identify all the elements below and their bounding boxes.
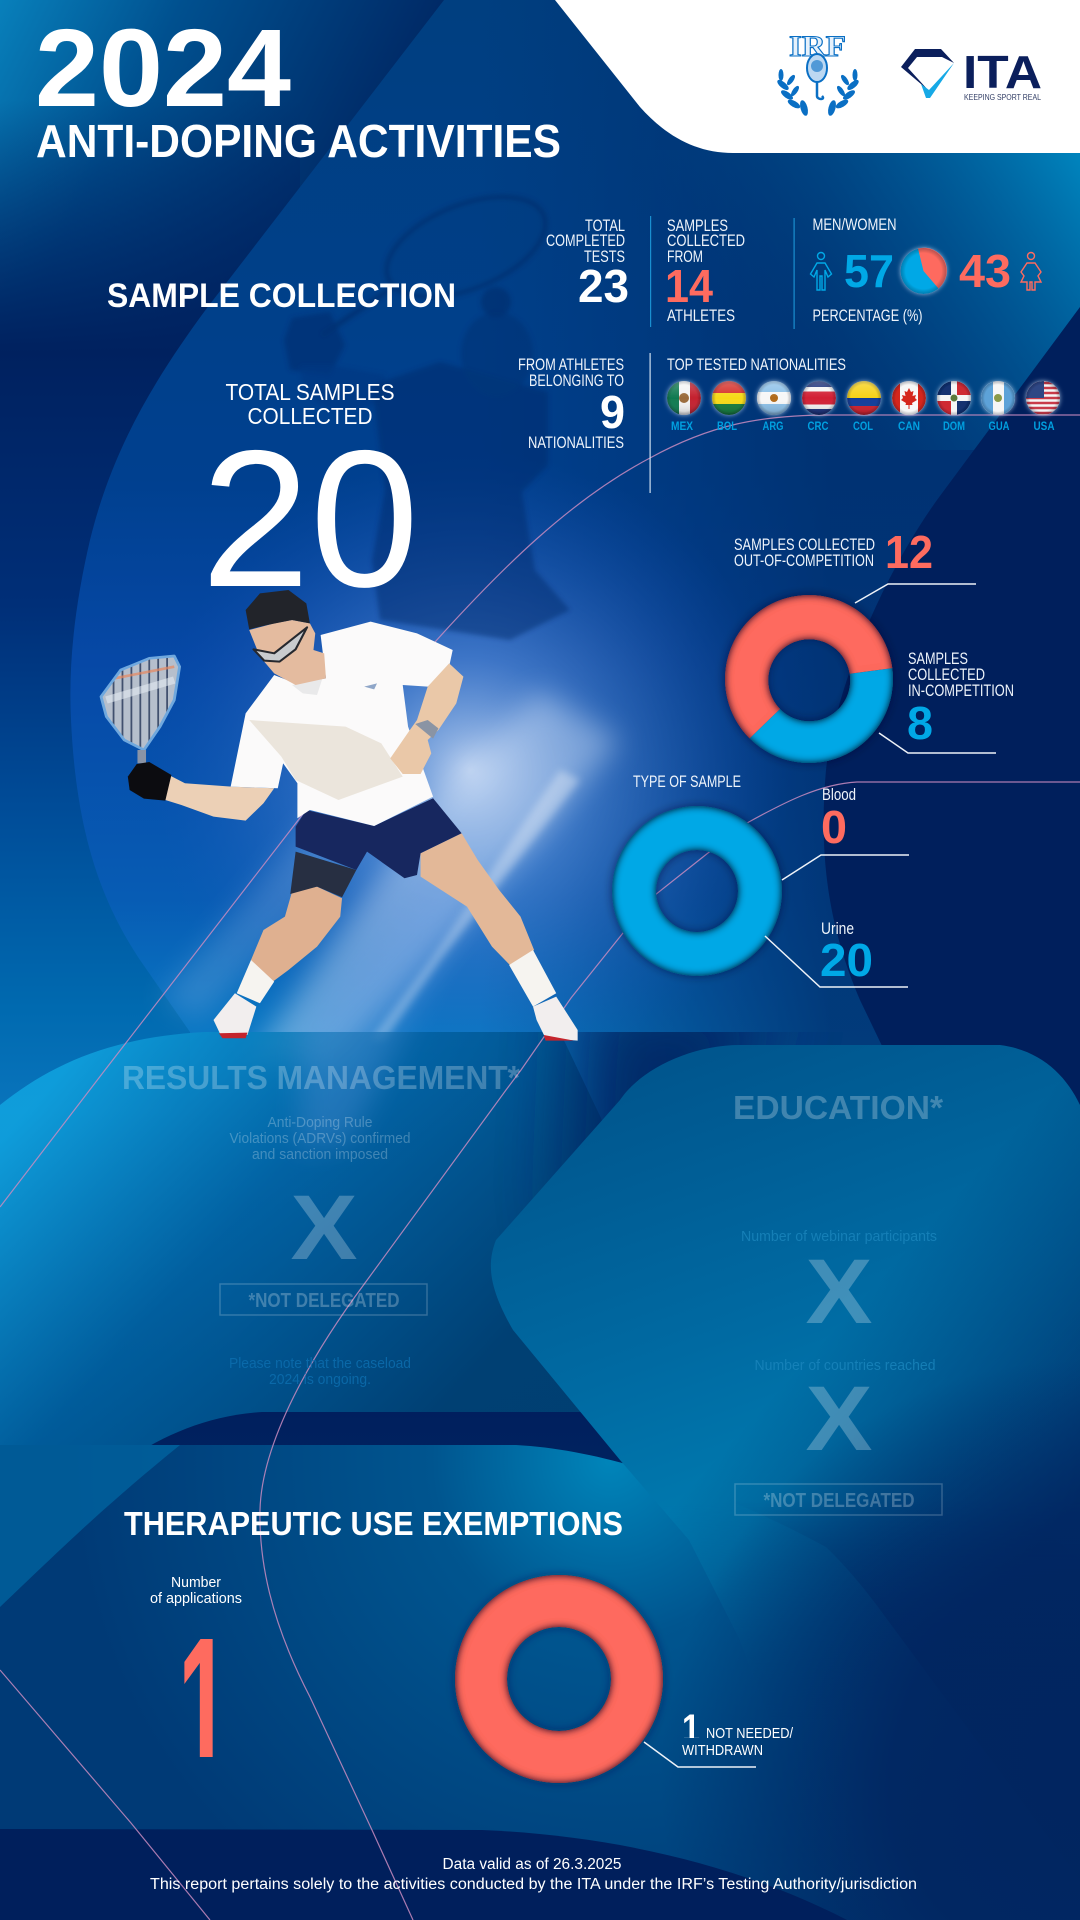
flag: Costa Rica xyxy=(802,381,836,415)
front sock and shoe xyxy=(214,960,274,1038)
athlete illustration xyxy=(101,590,578,1041)
flag codes: USA xyxy=(1034,419,1055,433)
stat: total completed tests: TOTAL xyxy=(585,217,625,235)
flag: Colombia xyxy=(847,381,881,415)
stat: samples collected from athletes xyxy=(665,217,745,325)
label: blood: 0 xyxy=(821,801,847,853)
donut chart: in vs out of competition xyxy=(725,595,893,763)
flag codes: MEX xyxy=(671,419,693,433)
section: results management: 2024 is ongoing. xyxy=(269,1371,371,1388)
label: urine: Urine xyxy=(821,920,854,938)
stat: samples collected from athletes: SAMPLES xyxy=(667,217,728,235)
section: education: Number of countries reached xyxy=(754,1357,936,1374)
section: results management: and sanction imposed xyxy=(252,1146,388,1163)
section: results management: Please note that the caseload xyxy=(229,1355,411,1372)
header white corner xyxy=(555,0,1080,153)
stat: total completed tests: 23 xyxy=(578,260,629,312)
section: education: X xyxy=(806,1241,872,1343)
background photo: faded athlete xyxy=(284,177,570,640)
divider xyxy=(794,218,795,329)
flag: USA xyxy=(1026,381,1060,415)
total samples collected: TOTAL SAMPLES xyxy=(226,379,394,405)
footer note xyxy=(150,1856,917,1893)
logo: ITA: KEEPING SPORT REAL xyxy=(964,92,1041,102)
label: in competition: COLLECTED xyxy=(908,666,985,684)
stat: men women percentage: PERCENTAGE (%) xyxy=(812,307,922,325)
heading: sample collection: SAMPLE COLLECTION xyxy=(107,277,456,315)
stat: nationalities: FROM ATHLETES xyxy=(518,356,624,374)
donut chart: TUE outcome xyxy=(455,1575,663,1783)
total samples collected: COLLECTED xyxy=(248,403,372,429)
title xyxy=(35,7,561,167)
icon: man xyxy=(810,252,832,290)
icon: woman xyxy=(1021,252,1041,290)
flag: Canada xyxy=(892,381,926,415)
flag codes: GUA xyxy=(988,419,1010,433)
stat: men women percentage xyxy=(810,216,1041,325)
label: out of competition: SAMPLES COLLECTED xyxy=(734,536,875,554)
label: in competition: SAMPLES xyxy=(908,650,968,668)
stat: number of applications xyxy=(150,1576,242,1757)
flag codes: CRC xyxy=(808,419,829,433)
heading: therapeutic use exemptions: THERAPEUTIC USE EXEMPTIONS xyxy=(124,1505,623,1542)
back leg xyxy=(421,833,534,965)
flag codes: COL xyxy=(853,419,873,433)
flag codes: BOL xyxy=(717,419,737,433)
section: education xyxy=(733,1089,943,1515)
total samples collected: 20 xyxy=(201,410,419,628)
stat: samples collected from athletes: COLLECTED xyxy=(667,232,745,250)
divider xyxy=(650,353,651,493)
logo: IRF xyxy=(776,30,860,117)
shorts xyxy=(296,798,462,878)
logo: ITA xyxy=(901,46,1042,102)
stat: samples collected from athletes: FROM xyxy=(667,248,703,266)
stat: nationalities xyxy=(518,356,625,452)
footer band xyxy=(0,1829,847,1920)
section: results management: *NOT DELEGATED xyxy=(248,1290,400,1312)
section: education: Number of webinar participants xyxy=(741,1228,937,1245)
pie: men women split xyxy=(900,248,947,294)
compression sleeve xyxy=(290,852,356,897)
hair xyxy=(246,590,310,629)
stat: men women percentage: MEN/WOMEN xyxy=(812,216,896,234)
label: out of competition xyxy=(734,526,976,603)
footer note: Data valid as of 26.3.2025 xyxy=(442,1856,622,1873)
stat: nationalities: BELONGING TO xyxy=(529,372,624,390)
stat: total completed tests xyxy=(546,217,629,312)
label: urine xyxy=(765,920,908,987)
glove xyxy=(128,762,171,801)
label: urine: 20 xyxy=(820,934,873,986)
flag: Mexico xyxy=(667,381,701,415)
label: blood xyxy=(782,786,909,880)
racket xyxy=(101,653,180,763)
section: education: EDUCATION* xyxy=(733,1089,943,1126)
flag codes xyxy=(671,419,1055,433)
flag: Guatemala xyxy=(981,381,1015,415)
flag: Bolivia xyxy=(712,381,746,415)
watch xyxy=(415,720,438,739)
logo: ITA: ITA xyxy=(963,46,1042,98)
arm xyxy=(165,775,274,821)
label: in competition: IN-COMPETITION xyxy=(908,682,1014,700)
flag: Dominican Republic xyxy=(937,381,971,415)
section: education: X xyxy=(806,1368,872,1470)
stat: samples collected from athletes: 14 xyxy=(665,260,713,312)
section: results management: RESULTS MANAGEMENT* xyxy=(122,1059,520,1096)
stat: samples collected from athletes: ATHLETES xyxy=(667,307,735,325)
label: in competition: 8 xyxy=(907,697,933,749)
flag codes: ARG xyxy=(762,419,784,433)
front leg xyxy=(251,887,342,983)
title: ANTI-DOPING ACTIVITIES xyxy=(36,115,561,167)
top tested nationalities: TOP TESTED NATIONALITIES xyxy=(667,356,846,374)
label: in competition xyxy=(879,650,1014,753)
title: 2024 xyxy=(35,7,291,130)
flag: Argentina xyxy=(757,381,791,415)
face xyxy=(249,620,326,685)
logo: IRF: IRF xyxy=(789,30,846,63)
label: not needed withdrawn: WITHDRAWN xyxy=(682,1742,763,1759)
flag codes: DOM xyxy=(943,419,965,433)
section: results management: X xyxy=(290,1177,358,1279)
back sock and shoe xyxy=(509,950,578,1041)
panel background: therapeutic use exemptions xyxy=(0,1412,1080,1920)
decorative pink curves xyxy=(0,415,1080,1920)
stat: nationalities: 9 xyxy=(600,386,625,438)
label: out of competition: 12 xyxy=(885,526,933,578)
heading: type of sample: TYPE OF SAMPLE xyxy=(633,773,741,791)
section: results management xyxy=(122,1059,520,1388)
stat: men women percentage: 43 xyxy=(959,245,1011,297)
divider xyxy=(650,216,651,327)
goggles xyxy=(253,627,307,662)
label: not needed withdrawn: NOT NEEDED/ xyxy=(706,1725,794,1742)
label: blood: Blood xyxy=(822,786,856,804)
stat: nationalities: NATIONALITIES xyxy=(528,434,624,452)
label: not needed withdrawn: 1 xyxy=(682,1707,700,1751)
label: out of competition: OUT-OF-COMPETITION xyxy=(734,552,874,570)
stat: number of applications: of applications xyxy=(150,1590,242,1607)
section: results management: Violations (ADRVs) confirmed xyxy=(230,1130,410,1147)
shirt xyxy=(231,622,453,826)
stat: total completed tests: TESTS xyxy=(584,248,625,266)
donut chart: type of sample xyxy=(612,806,782,976)
stat: total completed tests: COMPLETED xyxy=(546,232,625,250)
panel background: results management xyxy=(0,880,900,1445)
stat: number of applications: Number xyxy=(171,1574,221,1591)
flag codes: CAN xyxy=(898,419,920,433)
top tested nationalities xyxy=(667,356,1060,433)
section: education: *NOT DELEGATED xyxy=(764,1490,914,1512)
section: results management: Anti-Doping Rule xyxy=(268,1114,372,1131)
footer note: This report pertains solely to the activities conducted by the ITA under the IRF’s Testing Authority/jurisdiction xyxy=(150,1876,917,1893)
panel background: education xyxy=(491,1045,1080,1604)
stat: number of applications: 1 xyxy=(178,1595,230,1824)
stat: men women percentage: 57 xyxy=(844,245,894,297)
right arm xyxy=(390,663,463,774)
label: not needed withdrawn xyxy=(644,1714,793,1768)
